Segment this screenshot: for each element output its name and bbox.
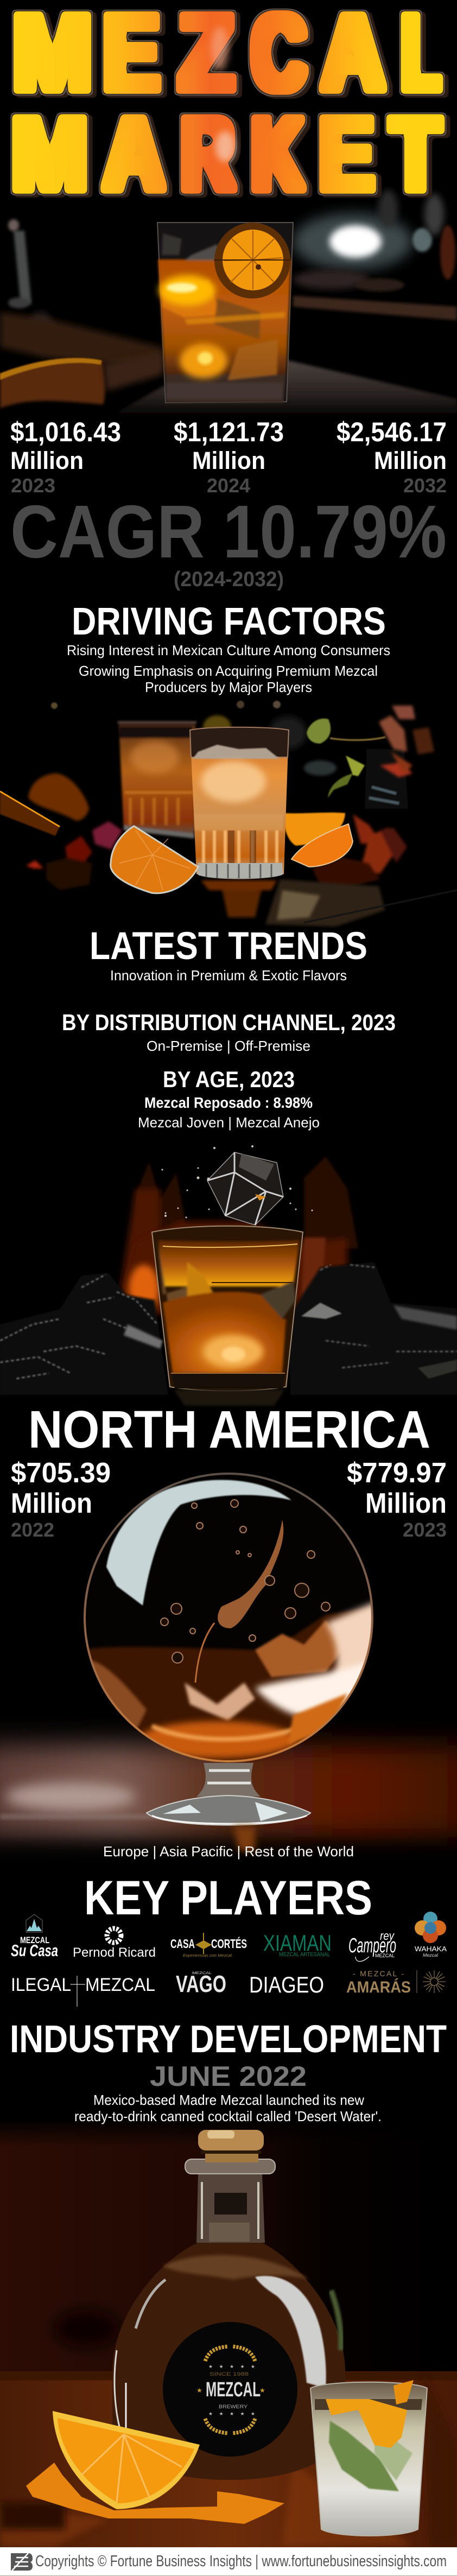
dark wall: [0, 2120, 457, 2375]
wooden table highlight: [201, 879, 457, 927]
coals right: [289, 1262, 457, 1395]
logo: Rey Campero: MEZCAL: [375, 1953, 395, 1958]
photo: mezcal bottle with orange and shot glass: [0, 2120, 457, 2547]
bottle label: ★: [196, 2387, 202, 2394]
title line: MARKET: R: [181, 97, 234, 212]
wall fade and shadows: [0, 2120, 457, 2347]
logo: Mezcal Su Casa: Su Casa: [11, 1941, 58, 1960]
droplets: [161, 1500, 330, 1663]
distribution channel segments: On-Premise | Off-Premise: [147, 1038, 310, 1054]
logo: Xiaman: MEZCAL ARTESANAL: [279, 1952, 330, 1958]
stat: 2024 market size: $1,121.73: [174, 417, 284, 447]
logo: Pernod Ricard: [73, 1928, 156, 1960]
title: Mezcal Market: [11, 0, 440, 212]
orange half behind: [283, 813, 345, 846]
orange strip: [0, 791, 60, 836]
logo: Rey Campero: rey: [380, 1929, 395, 1943]
orange peel: [26, 2463, 284, 2524]
CAGR headline: (2024-2032): [174, 568, 284, 591]
coals left: [0, 1273, 168, 1395]
logo: Mezcal Su Casa: MEZCAL: [20, 1935, 49, 1945]
glass stem and foot: [147, 1763, 310, 1851]
photo: whisky glass, ice cube and coals: [0, 1145, 457, 1406]
footer bar: [0, 2547, 457, 2576]
bottle label: ★★★★★: [208, 2411, 255, 2416]
development text: ready-to-drink canned cocktail called 'Desert Water'.: [74, 2108, 382, 2124]
crescent highlight: [106, 1480, 291, 1606]
by age segments: Mezcal Joven | Mezcal Anejo: [138, 1114, 320, 1131]
bottle label: MEZCAL: [206, 2378, 261, 2401]
logo: Pernod Ricard: Pernod Ricard: [73, 1945, 156, 1960]
logo: Casa Cortes: CASA: [170, 1937, 195, 1951]
stat: 2023 market size: 2023: [11, 474, 55, 497]
flowers left: [26, 821, 122, 890]
driving factors text: [67, 642, 390, 695]
logo: Ilegal Mezcal: [11, 1975, 155, 2007]
title line: MARKET: T: [391, 97, 440, 212]
orange wedge: [53, 2411, 200, 2509]
heading: driving factors: DRIVING FACTORS: [72, 600, 386, 643]
driving factors text: Growing Emphasis on Acquiring Premium Mezcal: [79, 663, 378, 679]
stat: north america 2023: 2023: [403, 1519, 447, 1541]
logo: Xiaman: XIAMAN: [263, 1930, 332, 1956]
stat: 2024 market size: Million: [192, 447, 265, 474]
title line: MARKET: K: [252, 97, 302, 212]
stat: 2023 market size: [10, 417, 121, 497]
cork stopper: [198, 2130, 264, 2162]
development text: Mexico-based Madre Mezcal launched its new: [93, 2092, 364, 2108]
logo: Amaras: [346, 1969, 446, 1996]
logo: Casa Cortes: Experiencias con Mezcal: [183, 1954, 232, 1958]
logo: Vago: VAGO: [176, 1971, 226, 1997]
stat: 2032 market size: 2032: [403, 474, 447, 497]
orange wedge right: [291, 824, 353, 867]
photo: amber cocktail on bar: [0, 190, 457, 417]
heading: latest trends: LATEST TRENDS: [90, 925, 367, 968]
stat: 2024 market size: 2024: [207, 474, 250, 497]
stat: north america 2022: 2022: [11, 1519, 54, 1541]
orange strip edge: [0, 791, 60, 827]
stat: north america 2023: [347, 1457, 447, 1541]
pour stream: [218, 1520, 283, 1628]
wooden table: [0, 2371, 457, 2547]
stat: north america 2023: $779.97: [347, 1457, 447, 1489]
latest trends text: Innovation in Premium & Exotic Flavors: [110, 967, 347, 984]
stat: 2023 market size: $1,016.43: [10, 417, 121, 447]
title line: MARKET: M: [11, 97, 88, 212]
logo: Casa Cortes: CORTÉS: [211, 1936, 247, 1951]
icon: orange slice: [214, 223, 291, 299]
logo: Ilegal Mezcal: ILEGAL: [11, 1975, 71, 1995]
logo: Diageo: DIAGEO: [249, 1972, 324, 1997]
logo: Amaras: - MEZCAL -: [353, 1969, 404, 1978]
title line: MARKET: A: [104, 97, 164, 212]
stat: 2032 market size: $2,546.17: [337, 417, 447, 447]
driving factors text: Rising Interest in Mexican Culture Among Consumers: [67, 642, 390, 658]
photo: two cocktail glasses with oranges and flowers: [0, 701, 457, 927]
stat: north america 2023: Million: [365, 1488, 447, 1519]
orange round: [28, 773, 89, 821]
stat: north america 2022: $705.39: [11, 1457, 111, 1489]
heading: by age: BY AGE, 2023: [163, 1067, 295, 1092]
orange wedge left: [111, 826, 198, 893]
stat: north america 2022: [11, 1457, 111, 1541]
bottle label: SINCE 1988: [210, 2371, 249, 2377]
stat: 2032 market size: [337, 417, 447, 497]
flowers upper right: [379, 706, 434, 777]
glass: [157, 223, 293, 403]
logo: Casa Cortes: [170, 1933, 247, 1958]
bottle label: BREWERY: [219, 2404, 247, 2409]
bottle label: ★★★★★: [208, 2364, 255, 2369]
whisky glass: [152, 1226, 303, 1391]
blurred background lights: [51, 701, 337, 776]
stat: north america 2022: Million: [11, 1488, 92, 1519]
title line: MARKET: E: [319, 97, 374, 212]
front glass: [190, 727, 289, 879]
logo: Rey Campero: [348, 1929, 396, 1962]
icon: Fortune Business Insights logo: [11, 2553, 33, 2571]
date: june 2022: JUNE 2022: [150, 2061, 307, 2092]
logo: Mezcal Su Casa: [11, 1914, 58, 1960]
stat: 2024 market size: [174, 417, 284, 497]
title gloss highlights: [211, 27, 235, 162]
logo: Wahaka: [415, 1912, 447, 1958]
photo: brandy sphere glass with swirling liquid: [0, 1473, 457, 1870]
stat: 2032 market size: Million: [374, 447, 447, 474]
logo: Wahaka: Mezcal: [423, 1953, 438, 1958]
development text: [74, 2092, 382, 2124]
fire glow: [117, 1156, 358, 1314]
heading: key players: KEY PLAYERS: [84, 1870, 372, 1925]
leaves and stem: [307, 719, 385, 798]
bottle label: [163, 2322, 297, 2457]
logo: Rey Campero: Campero: [348, 1934, 396, 1957]
dark jar: [365, 749, 408, 809]
heading: by distribution channel: BY DISTRIBUTION CHANNEL, 2023: [62, 1010, 396, 1035]
flowers right: [312, 814, 407, 887]
blurred bar background: [0, 190, 457, 417]
bottle: [112, 2130, 345, 2480]
stat: 2023 market size: Million: [10, 447, 84, 474]
back glass: [118, 722, 196, 839]
driving factors text: Producers by Major Players: [145, 679, 312, 695]
other regions: Europe | Asia Pacific | Rest of the World: [103, 1843, 354, 1860]
logo: Vago: MEZCAL: [192, 1972, 212, 1975]
table surface: [0, 1745, 457, 1870]
logo: Wahaka: WAHAKA: [415, 1945, 447, 1953]
ice cube: [207, 1152, 283, 1225]
splash droplets: [162, 1145, 313, 1218]
logo: Amaras: AMARÁS: [346, 1978, 411, 1996]
bottle label: ★: [259, 2387, 265, 2394]
shot glass: [310, 2380, 427, 2536]
by age highlight: Mezcal Reposado : 8.98%: [144, 1094, 313, 1111]
table reflection: [174, 1389, 285, 1406]
sphere bowl: [81, 1473, 377, 1769]
logo: Ilegal Mezcal: MEZCAL: [85, 1975, 155, 1995]
